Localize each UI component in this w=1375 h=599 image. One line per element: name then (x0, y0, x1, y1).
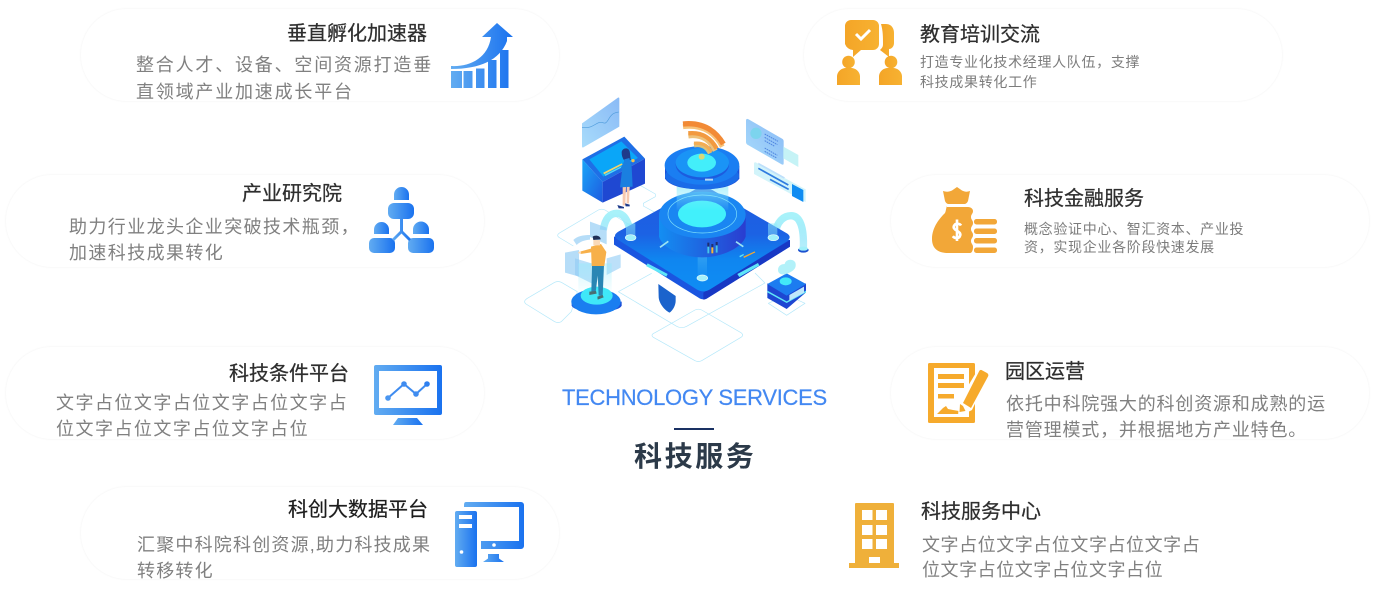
text: big data description (137, 535, 431, 581)
central isometric illustration (524, 98, 809, 362)
card background: industry institute (5, 174, 485, 268)
console machine (582, 137, 645, 203)
icon: organization tree (369, 187, 434, 253)
heading: 教育培训交流: 教育培训交流 (920, 24, 1040, 46)
heading: 产业研究院: 产业研究院 (242, 183, 342, 205)
text: service center description: 文字占位文字占位文字占位文字占 (922, 535, 1200, 555)
man on pedestal (565, 222, 622, 314)
icon: money bag with coins (932, 187, 997, 253)
text: incubation description: 整合人才、设备、空间资源打造垂 (136, 55, 433, 75)
icon: monitor with line chart (374, 365, 442, 425)
text: finance description: 概念验证中心、智汇资本、产业投 (1024, 221, 1244, 237)
server with cloud (767, 260, 806, 309)
card background: finance (890, 174, 1370, 268)
text: finance description: 资，实现企业各阶段快速发展 (1024, 239, 1215, 255)
text: platform description: 位文字占位文字占位文字占位 (56, 419, 309, 439)
right floating panels (746, 119, 806, 202)
text: finance description (1024, 221, 1244, 255)
light beam (677, 185, 728, 210)
text: education description: 打造专业化技术经理人队伍，支撑 (920, 54, 1140, 70)
text: park description (1006, 394, 1326, 440)
main platform (614, 187, 809, 300)
icon: office building (849, 503, 899, 568)
heading: 科技金融服务: 科技金融服务 (1024, 188, 1144, 210)
heading: 科创大数据平台: 科创大数据平台 (288, 499, 428, 521)
text: platform description: 文字占位文字占位文字占位文字占 (56, 393, 348, 413)
text: service center description (922, 535, 1200, 580)
short divider (674, 428, 714, 430)
text: service center description: 位文字占位文字占位文字占位 (922, 560, 1163, 580)
text: incubation description: 直领域产业加速成长平台 (136, 82, 354, 102)
card background: big data platform (80, 486, 560, 580)
arches (603, 213, 803, 249)
circuit outlines (525, 183, 805, 362)
wifi symbol (683, 124, 723, 160)
shield (658, 284, 676, 313)
text: park description: 依托中科院强大的科创资源和成熟的运 (1006, 394, 1326, 414)
Chinese title: 科技服务 (634, 441, 756, 472)
text: park description: 营管理模式，并根据地方产业特色。 (1006, 420, 1307, 440)
icon: desktop computer (455, 502, 524, 567)
card background: vertical incubation (80, 8, 560, 102)
text: institute description (69, 217, 360, 263)
woman figure (617, 148, 635, 208)
central heading block (562, 385, 827, 472)
heading: 科技服务中心: 科技服务中心 (921, 501, 1041, 523)
English title: TECHNOLOGY SERVICES (562, 385, 827, 410)
text: education description: 科技成果转化工作 (920, 74, 1037, 90)
heading: 垂直孵化加速器: 垂直孵化加速器 (287, 23, 427, 45)
icon: rising arrow with bars (451, 23, 513, 88)
text: incubation description (136, 55, 433, 102)
text: big data description: 转移转化 (137, 561, 214, 581)
central cylinder (659, 192, 746, 257)
text: institute description: 助力行业龙头企业突破技术瓶颈， (69, 217, 360, 237)
chart panel (582, 97, 619, 148)
heading: 园区运营: 园区运营 (1005, 361, 1085, 383)
heading: 科技条件平台: 科技条件平台 (229, 363, 349, 385)
icon: document with pen (928, 363, 990, 423)
card background: park operations (890, 346, 1370, 440)
card background: education (803, 8, 1283, 102)
text: big data description: 汇聚中科院科创资源,助力科技成果 (137, 535, 431, 555)
text: platform description (56, 393, 348, 439)
card background: technology platform (5, 346, 485, 440)
icon: two people talking (837, 20, 902, 85)
text: institute description: 加速科技成果转化 (69, 243, 224, 263)
floating disc (665, 146, 739, 189)
text: education description (920, 54, 1140, 90)
